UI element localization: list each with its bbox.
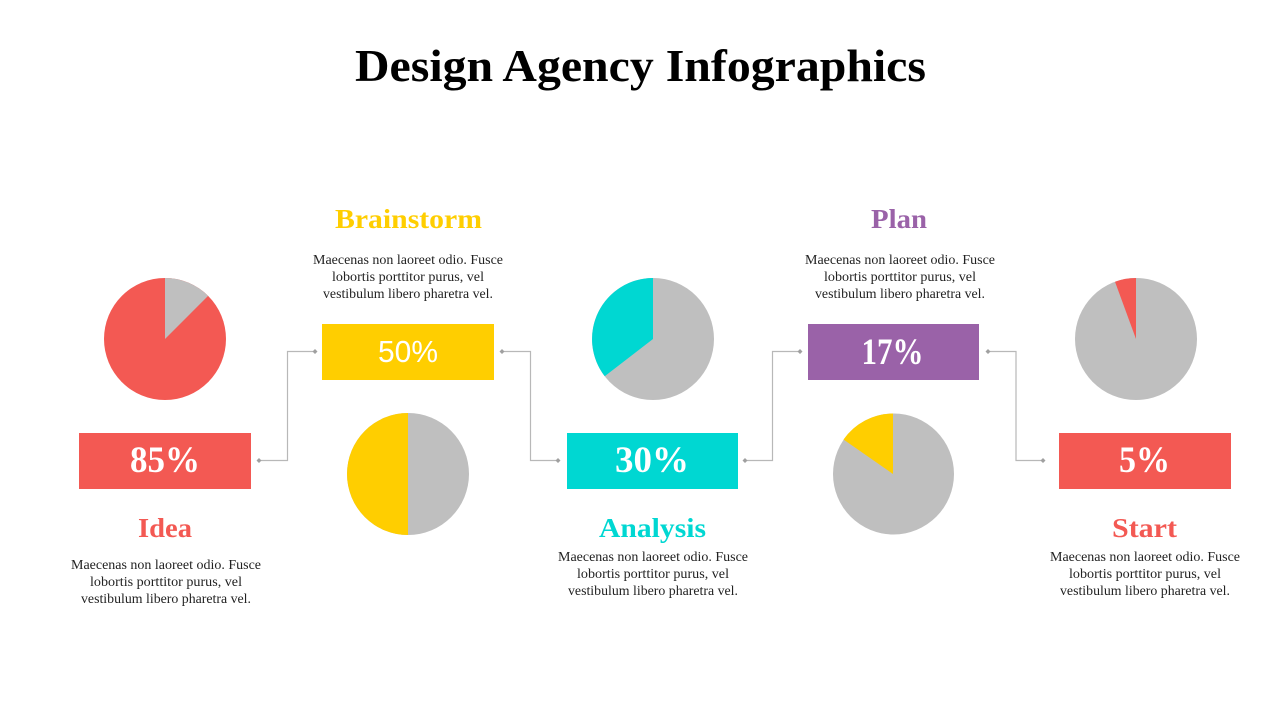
description: Brainstorm: Maecenas non laoreet odio. Fusce <box>313 252 503 267</box>
heading: Plan: Plan <box>871 204 927 234</box>
description: Idea: Maecenas non laoreet odio. Fusce <box>71 557 261 572</box>
percent box: 5% <box>1059 433 1231 489</box>
percent box: 85%: 85% <box>130 440 200 481</box>
description: Plan: vestibulum libero pharetra vel. <box>815 286 985 301</box>
connector: Idea to Brainstorm <box>256 349 318 463</box>
description: Brainstorm: lobortis porttitor purus, vel <box>332 269 484 284</box>
connector: Plan to Start <box>986 349 1046 463</box>
connector: Brainstorm to Analysis <box>500 349 560 463</box>
step: Brainstorm <box>313 204 503 535</box>
percent box: 30% <box>567 433 738 489</box>
percent box: 50% <box>322 324 494 380</box>
description: Plan: Maecenas non laoreet odio. Fusce <box>805 252 995 267</box>
percent box: 50%: 50% <box>378 334 438 369</box>
percent box: 17%: 17% <box>862 332 924 373</box>
description: Idea: lobortis porttitor purus, vel <box>90 574 242 589</box>
description: Analysis: lobortis porttitor purus, vel <box>577 566 729 581</box>
pie chart: Analysis 30% <box>592 278 714 400</box>
description: Analysis: Maecenas non laoreet odio. Fusce <box>558 549 748 564</box>
step: Start <box>1050 278 1240 598</box>
percent box: 30%: 30% <box>615 440 689 481</box>
title: Design Agency Infographics <box>355 40 926 91</box>
description: Plan: lobortis porttitor purus, vel <box>824 269 976 284</box>
connector: Analysis to Plan <box>742 349 802 463</box>
description: Start <box>1050 549 1240 598</box>
pie chart: Idea 85% <box>104 278 226 400</box>
percent box: 85% <box>79 433 251 489</box>
pie chart: Brainstorm 50% <box>347 413 469 535</box>
heading: Analysis: Analysis <box>599 513 706 543</box>
step: Idea <box>71 278 261 606</box>
description: Analysis <box>558 549 748 598</box>
description: Idea <box>71 557 261 606</box>
description: Plan <box>805 252 995 301</box>
description: Brainstorm <box>313 252 503 301</box>
pie chart: Plan 17% <box>833 414 954 534</box>
heading: Idea: Idea <box>138 513 193 543</box>
description: Start: lobortis porttitor purus, vel <box>1069 566 1221 581</box>
description: Start: vestibulum libero pharetra vel. <box>1060 583 1230 598</box>
heading: Brainstorm: Brainstorm <box>335 204 483 234</box>
description: Brainstorm: vestibulum libero pharetra vel. <box>323 286 493 301</box>
step: Plan <box>805 204 995 534</box>
description: Start: Maecenas non laoreet odio. Fusce <box>1050 549 1240 564</box>
description: Idea: vestibulum libero pharetra vel. <box>81 591 251 606</box>
step: Analysis <box>558 278 748 598</box>
heading: Start: Start <box>1112 513 1177 543</box>
description: Analysis: vestibulum libero pharetra vel. <box>568 583 738 598</box>
percent box: 17% <box>808 324 979 380</box>
percent box: 5%: 5% <box>1119 440 1170 481</box>
pie chart: Start 5% <box>1075 278 1197 400</box>
